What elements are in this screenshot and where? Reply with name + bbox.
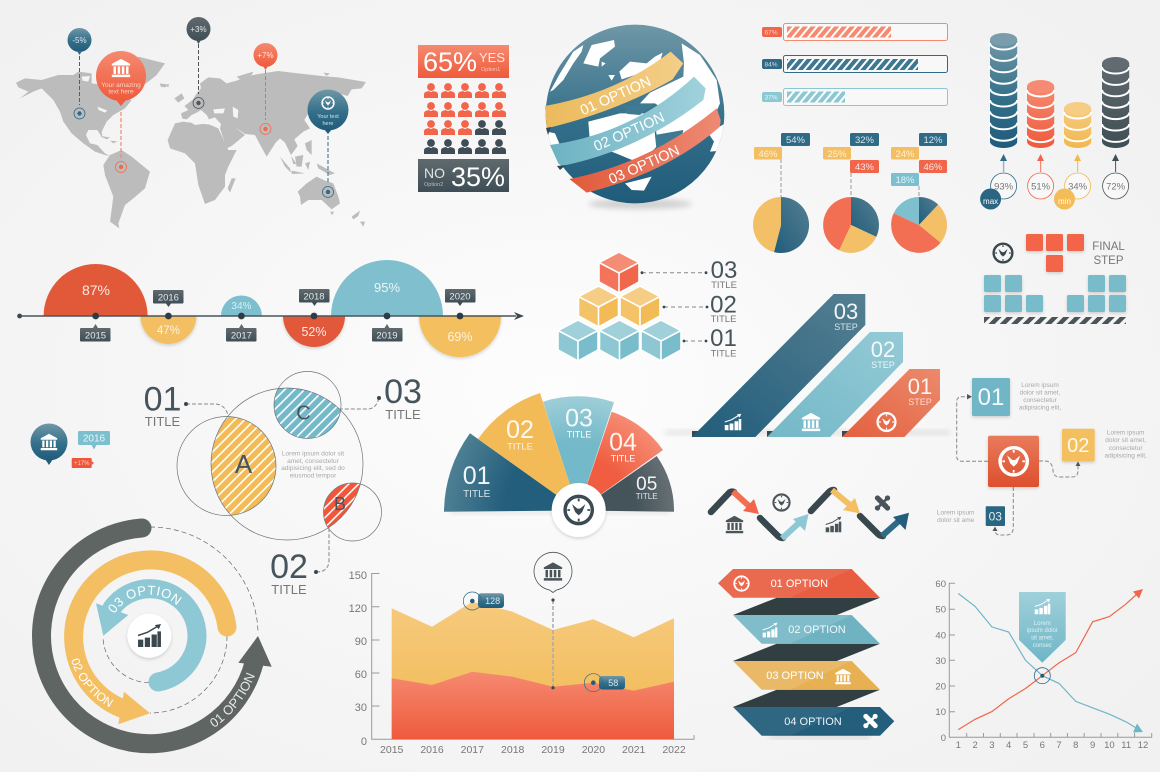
- x labels: 2: [972, 740, 978, 751]
- banner: no 35%: NO: [424, 165, 445, 181]
- slice 01: TITLE: [463, 489, 491, 500]
- pie chart 2: 32%: [855, 135, 875, 146]
- x axis labels: 2018: [501, 744, 525, 756]
- middle arrow: 02 option: 02 OPTION: [72, 658, 114, 708]
- slice 03: [543, 396, 614, 510]
- slice 04: [578, 412, 663, 510]
- banner: 65% yes: YES: [479, 50, 505, 65]
- panel: timeline: [17, 260, 524, 357]
- x labels: 9: [1090, 740, 1095, 751]
- coin stack 34%: 34%: [1068, 182, 1088, 192]
- globe sphere: [546, 25, 725, 203]
- panel: mini pin and tags: [30, 424, 110, 468]
- callout: [1019, 592, 1066, 663]
- slice 02: [478, 393, 578, 510]
- x labels: 1: [956, 740, 961, 751]
- panel: fan chart: [444, 393, 674, 537]
- bubble: +7% with pin: [254, 43, 278, 134]
- slice 02: 02: [506, 416, 534, 444]
- progress bar 37%: 37%: [764, 94, 778, 102]
- coin stack 72%: 72%: [1106, 182, 1126, 192]
- year tags: 2017: [231, 330, 252, 342]
- banner: no 35%: Option2: [424, 182, 443, 188]
- year tags: 2018: [303, 292, 325, 302]
- ribbon 03 option: [733, 661, 880, 690]
- pie chart 1: 54%: [786, 135, 806, 146]
- pyramid labels and leaders: 01: [710, 325, 737, 352]
- banner: no 35%: 35%: [451, 162, 505, 192]
- year tags: 2019: [376, 330, 398, 342]
- timeline percent labels: 47%: [157, 325, 180, 337]
- slice 01: 01: [463, 462, 491, 490]
- label 02 title: TITLE: [271, 582, 307, 597]
- slice 05: [578, 456, 674, 512]
- ribbon: 02 option: 02 OPTION: [592, 110, 667, 155]
- teal blocks: [984, 275, 1126, 312]
- y axis labels: 150: [349, 570, 367, 582]
- year tags: [80, 289, 476, 342]
- text: venn description: amet, consectetur: [287, 458, 340, 465]
- tag: 2016: 2016: [83, 434, 106, 444]
- text: venn description: [281, 450, 345, 480]
- timeline percent labels: 34%: [231, 301, 252, 312]
- zigzag arrows: [733, 490, 909, 538]
- step 02 ribbon: [767, 332, 903, 437]
- bubble: -5% with pin: -5%: [72, 36, 87, 45]
- label 03 title: [339, 373, 422, 422]
- map land: americas: [16, 57, 168, 228]
- slice 05: TITLE: [636, 492, 658, 501]
- label 01 title: TITLE: [145, 414, 181, 429]
- panel: zigzag arrows: [711, 490, 909, 538]
- panel: circular arrows: [32, 518, 272, 754]
- text: box 03 caption: [937, 510, 975, 524]
- marker 128: 128: [485, 596, 500, 606]
- label 01 title: 01: [144, 380, 181, 418]
- marker 128: [463, 592, 504, 610]
- marker 58: 58: [608, 678, 618, 688]
- callout: sit amet,: [1031, 636, 1054, 642]
- callout: ipsum dolor: [1027, 628, 1058, 634]
- panel: flow boxes: [937, 378, 1147, 535]
- pie chart 3: 12%: [923, 135, 943, 146]
- x labels: [956, 740, 1148, 751]
- banner: no 35%: [418, 159, 509, 192]
- pyramid labels and leaders: TITLE: [711, 280, 737, 291]
- venn circle outlines: [177, 372, 382, 541]
- ribbon 04 option: [733, 707, 894, 736]
- text: box 01 caption: dolor sit amet,: [1020, 390, 1061, 396]
- year tags: 2016: [158, 292, 179, 304]
- y labels: 0: [941, 733, 946, 744]
- y axis labels: 90: [355, 636, 367, 648]
- dashed guide arcs: [103, 527, 258, 713]
- callout: consec: [1033, 643, 1052, 649]
- pin with bank icon: [534, 552, 572, 689]
- y axis labels: 30: [355, 702, 367, 714]
- y labels: 10: [935, 707, 946, 718]
- text: box 02 caption: Lorem ipsum: [1107, 430, 1144, 436]
- coin stack 51%: 51%: [1031, 182, 1051, 192]
- x labels: 3: [989, 740, 995, 751]
- panel: final step blocks: [984, 234, 1126, 324]
- x axis labels: 2015: [380, 744, 404, 756]
- panel: line chart: [935, 579, 1152, 751]
- map land: eurasia, africa, oceania: [165, 71, 366, 227]
- banner: 65% yes: 65%: [423, 47, 477, 77]
- slice 04: TITLE: [611, 454, 635, 464]
- ribbon: 03 option: [569, 108, 721, 193]
- big bubble: your amazing text here: Your amazing: [101, 82, 141, 89]
- coin stack 34%: [1054, 102, 1091, 210]
- y axis labels: 0: [361, 736, 367, 748]
- box 03: 03: [989, 510, 1002, 524]
- y labels: 50: [935, 605, 946, 616]
- crossing marker: [1034, 668, 1050, 684]
- timeline percent labels: 95%: [374, 280, 400, 295]
- progress bar 67%: [762, 24, 948, 40]
- region B hatched: [324, 483, 360, 528]
- people grid: 13 coral, 7 dark: [424, 83, 506, 154]
- dashed connectors: [957, 397, 1078, 535]
- x axis labels: 2022: [662, 744, 686, 756]
- panel: cube pyramid: [558, 252, 737, 361]
- outer arrow: 01 option: [32, 518, 272, 754]
- pie chart 3: 24%: [895, 149, 915, 160]
- box 02: 02: [1067, 435, 1089, 457]
- pyramid labels and leaders: [641, 257, 737, 360]
- region C hatched: [274, 388, 340, 438]
- panel: venn diagram: [144, 372, 422, 597]
- pie chart 1: 46%: [758, 149, 778, 160]
- panel: yes/no people pictogram: [418, 45, 509, 192]
- coral increasing line: [958, 589, 1143, 730]
- centre clock hub: [552, 483, 606, 537]
- inner arrow: 03 option: [96, 579, 206, 692]
- slice 02: TITLE: [507, 442, 533, 452]
- slice 03: 03: [565, 405, 593, 433]
- progress bar 67%: 67%: [764, 30, 778, 36]
- step 01 ribbon: [842, 369, 940, 437]
- coin stack 93%: max: [983, 197, 998, 206]
- globe shadow: [588, 199, 692, 209]
- text: box 03 caption: Lorem ipsum: [937, 510, 974, 516]
- coin stack 93%: 93%: [994, 182, 1014, 192]
- venn letters: [235, 402, 346, 514]
- fan shadow: [450, 510, 670, 513]
- bubble: -5% with pin: [68, 28, 92, 119]
- progress bar 84%: [762, 56, 948, 72]
- pie chart 1: [753, 133, 810, 253]
- text: box 03 caption: dolor sit ame: [937, 517, 975, 524]
- marker 58: [584, 674, 625, 692]
- text: box 02 caption: dolor sit amet,: [1105, 437, 1146, 444]
- hazard stripe: [984, 317, 1126, 324]
- y axis labels: 120: [349, 603, 367, 615]
- timeline half circles: [44, 260, 501, 357]
- ribbon 04 option: 04 OPTION: [784, 716, 842, 728]
- slice 05: 05: [636, 474, 657, 495]
- text: box 01 caption: adipisicing elit,: [1019, 404, 1061, 412]
- x axis labels: [380, 744, 686, 756]
- region A hatched: [211, 417, 276, 515]
- step 02 ribbon: STEP: [871, 360, 895, 370]
- dark connector folds: [733, 598, 880, 707]
- pie chart 3: 46%: [923, 162, 943, 173]
- step 01 ribbon: 01: [908, 374, 932, 399]
- cubes: [558, 252, 681, 361]
- box 02: [1062, 429, 1095, 461]
- timeline percent labels: [82, 280, 473, 344]
- timeline axis arrow: [17, 312, 524, 320]
- ribbon shadow: [665, 431, 950, 434]
- label 03 title: TITLE: [385, 407, 421, 422]
- step 03 ribbon: [692, 294, 865, 437]
- label 02 title: [270, 528, 329, 597]
- ribbon: 02 option: [550, 77, 706, 170]
- bubble: +3% with pin: +3%: [190, 25, 207, 34]
- central clock box: [988, 436, 1039, 487]
- x axis labels: 2017: [461, 744, 484, 756]
- text: venn description: Lorem ipsum dolor sit: [282, 450, 344, 458]
- bubble: +7% with pin: +7%: [257, 51, 274, 60]
- x labels: 7: [1056, 740, 1062, 751]
- text: box 02 caption: [1105, 430, 1147, 460]
- pyramid labels and leaders: TITLE: [711, 348, 736, 360]
- step 02 ribbon: 02: [871, 337, 895, 362]
- coin stack 72%: [1102, 57, 1129, 199]
- coin stack 34%: min: [1058, 197, 1071, 206]
- big bubble: your amazing text here: [96, 51, 146, 172]
- ribbon 03 option: 03 OPTION: [766, 670, 824, 682]
- label 03 title: 03: [384, 373, 422, 411]
- banner: 65% yes: Option1: [481, 67, 500, 73]
- x labels: 5: [1023, 740, 1028, 751]
- x axis labels: 2021: [622, 744, 646, 756]
- final step heading: STEP: [1093, 255, 1124, 267]
- venn letters: B: [334, 494, 346, 514]
- ribbon: 01 option: [545, 52, 683, 135]
- y labels: 20: [935, 681, 946, 692]
- panel: progress bars: [762, 24, 948, 106]
- panel: coin stacks: [980, 33, 1129, 210]
- ribbon 01 option: 01 OPTION: [771, 578, 828, 590]
- y labels: 40: [935, 630, 946, 641]
- coin stack 51%: [1027, 80, 1054, 199]
- pie chart 3: [891, 133, 947, 253]
- y labels: 30: [935, 656, 946, 667]
- pyramid labels and leaders: TITLE: [711, 314, 736, 325]
- centre chart icon: [127, 614, 171, 658]
- step 01 ribbon: STEP: [908, 397, 932, 407]
- coin stack 93%: [980, 33, 1017, 210]
- ribbon 02 option: [733, 615, 880, 644]
- x labels: 6: [1040, 740, 1045, 751]
- timeline percent labels: 87%: [82, 282, 110, 298]
- text: box 01 caption: consectetur: [1023, 397, 1058, 404]
- label 01 title: [144, 380, 228, 429]
- x axis labels: 2019: [541, 744, 565, 756]
- slice 01: [444, 433, 578, 512]
- panel: option ribbons: [718, 569, 894, 738]
- y axis labels: 60: [355, 669, 367, 681]
- x labels: 8: [1073, 740, 1078, 751]
- box 01: [972, 378, 1010, 416]
- x labels: 12: [1138, 740, 1148, 751]
- final step heading: FINAL: [1092, 241, 1125, 253]
- teal decreasing line: [958, 594, 1143, 732]
- icon: clock: [994, 244, 1012, 262]
- pie chart 2: 43%: [855, 162, 875, 173]
- venn letters: A: [235, 449, 253, 479]
- coral blocks: [1026, 234, 1084, 272]
- pie chart 2: [823, 133, 879, 253]
- y labels: 60: [935, 579, 946, 590]
- final step heading: [1092, 241, 1125, 267]
- coral area: [392, 672, 674, 739]
- ribbon shadow: [770, 736, 870, 738]
- slice 04: 04: [609, 429, 637, 457]
- big bubble: your text here: Your text: [317, 114, 339, 120]
- year tags: 2015: [85, 330, 106, 342]
- box 01: 01: [978, 384, 1004, 411]
- ribbon: 03 option: 03 OPTION: [607, 143, 682, 188]
- axes: [372, 574, 694, 739]
- text: box 01 caption: Lorem ipsum: [1021, 382, 1059, 389]
- x labels: 11: [1121, 740, 1131, 751]
- text: box 02 caption: consectetur: [1109, 445, 1143, 452]
- x axis labels: 2020: [582, 744, 605, 756]
- box 03: [986, 506, 1005, 526]
- panel: pie charts: [753, 133, 947, 253]
- banner: 65% yes: [418, 45, 509, 78]
- year tags: 2020: [449, 292, 471, 302]
- step 03 ribbon: 03: [834, 299, 858, 324]
- pyramid labels and leaders: 02: [710, 292, 737, 318]
- x labels: 10: [1104, 740, 1115, 751]
- pin with bank icon: [30, 424, 68, 465]
- zigzag dark segments: [711, 490, 883, 538]
- callout: Lorem: [1034, 621, 1051, 627]
- x axis labels: 2016: [420, 744, 444, 756]
- progress bar 37%: [762, 88, 948, 106]
- ribbon 02 option: 02 OPTION: [788, 624, 846, 636]
- pyramid labels and leaders: 03: [711, 257, 737, 284]
- text: box 02 caption: adipisicing elit,: [1105, 452, 1147, 460]
- pie chart 2: 25%: [827, 149, 847, 160]
- big bubble: your text here: here: [322, 121, 334, 127]
- text: box 01 caption: [1019, 382, 1061, 412]
- big bubble: your text here: [308, 90, 348, 198]
- y axis labels: [349, 570, 367, 748]
- ribbon 01 option: [718, 569, 880, 598]
- zigzag icons: [726, 494, 890, 533]
- tag: +17%: +17%: [74, 461, 90, 467]
- label 02 title: 02: [270, 548, 308, 586]
- panel: step ribbons: [665, 294, 950, 437]
- y labels: [935, 579, 946, 744]
- big bubble: your amazing text here: text here: [108, 88, 134, 96]
- line chart axes: [949, 583, 1152, 737]
- text: venn description: adipisicing elit, sed do: [281, 465, 345, 472]
- step 03 ribbon: STEP: [834, 322, 858, 332]
- panel: area chart: [349, 552, 694, 756]
- middle arrow: 02 option: [64, 550, 236, 724]
- panel: world map: [16, 17, 366, 228]
- progress bar 84%: 84%: [764, 62, 778, 68]
- bubble: +3% with pin: [186, 17, 210, 108]
- outer arrow: 01 option: 01 OPTION: [210, 672, 255, 727]
- ribbon: 01 option: 01 OPTION: [578, 74, 654, 119]
- text: venn description: eiusmod tempor: [290, 472, 337, 480]
- connector arrowheads: [967, 394, 1080, 531]
- inner arrow: 03 option: 03 OPTION: [108, 586, 182, 612]
- slice 03: TITLE: [567, 430, 591, 440]
- timeline percent labels: 69%: [447, 330, 473, 344]
- yellow area: [392, 602, 674, 739]
- x labels: 4: [1006, 740, 1011, 751]
- timeline percent labels: 52%: [301, 325, 327, 339]
- venn letters: C: [296, 402, 311, 424]
- pie chart 3: 18%: [895, 175, 915, 186]
- panel: globe with option ribbons: [545, 25, 725, 209]
